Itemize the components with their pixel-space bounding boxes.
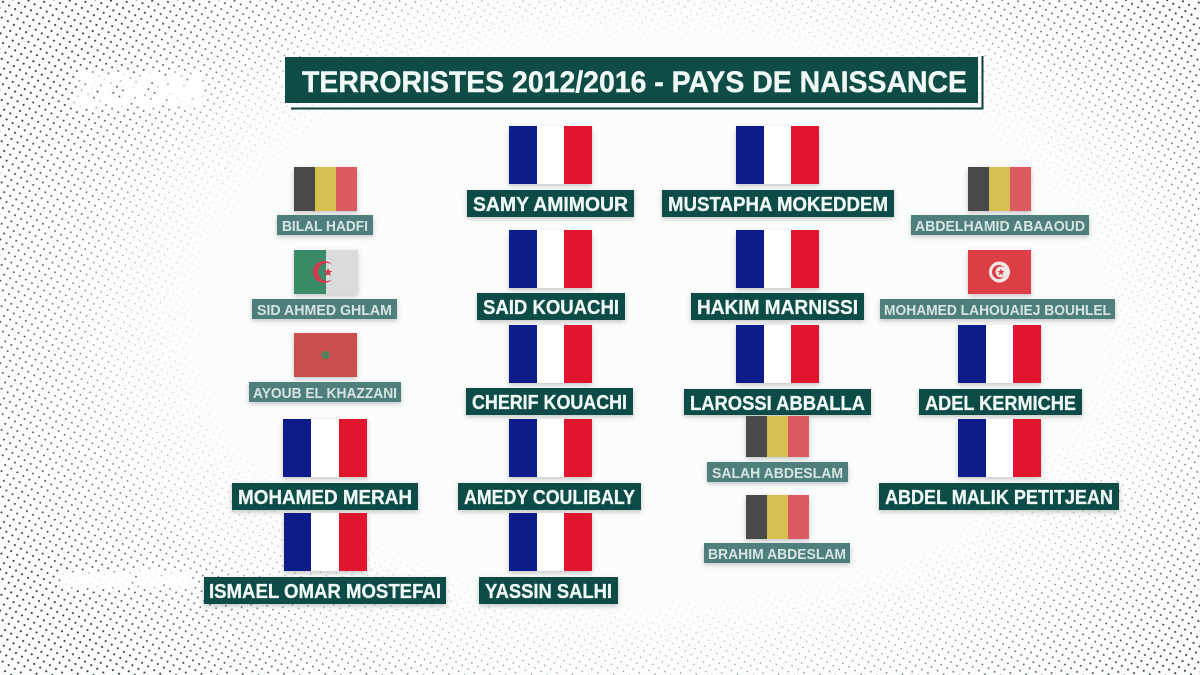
flag: Algeria — [294, 250, 358, 294]
person: Sid Ahmed Ghlam — [252, 250, 397, 319]
flag: Belgium — [746, 495, 809, 539]
name: Ayoub El Khazzani: AYOUB EL KHAZZANI — [253, 385, 397, 402]
flag: France — [509, 230, 592, 288]
name: Mustapha Mokeddem: MUSTAPHA MOKEDDEM — [668, 193, 888, 216]
person: Ayoub El Khazzani — [249, 333, 401, 402]
person: Yassin Salhi — [479, 513, 618, 604]
name: Mohamed Lahouaiej Bouhlel: MOHAMED LAHOUAIEJ BOUHLEL — [884, 302, 1111, 319]
name: Abdelhamid Abaaoud: ABDELHAMID ABAAOUD — [915, 218, 1085, 235]
person: Cherif Kouachi — [466, 325, 633, 415]
person: Samy Amimour — [467, 126, 634, 217]
flag: Belgium — [968, 167, 1031, 211]
person: Larossi Abballa — [684, 325, 871, 415]
title: TERRORISTES 2012/2016 - PAYS DE NAISSANCE — [302, 66, 967, 99]
name: Salah Abdeslam: SALAH ABDESLAM — [712, 465, 843, 482]
name: Abdel Malik Petitjean: ABDEL MALIK PETITJEAN — [885, 486, 1113, 509]
person: Said Kouachi — [477, 230, 625, 320]
flag: France — [284, 513, 367, 571]
name: Hakim Marnissi: HAKIM MARNISSI — [697, 296, 858, 319]
person: Brahim Abdeslam — [704, 495, 850, 563]
ghost logo: ZOOM: ZOOM — [74, 64, 204, 116]
name: Said Kouachi: SAID KOUACHI — [483, 296, 619, 319]
flag: France — [958, 325, 1041, 383]
person: Abdel Malik Petitjean — [879, 419, 1119, 510]
name: Adel Kermiche: ADEL KERMICHE — [925, 392, 1076, 415]
name: Samy Amimour: SAMY AMIMOUR — [473, 193, 628, 216]
name: Amedy Coulibaly: AMEDY COULIBALY — [464, 486, 635, 509]
flag: Tunisia — [968, 250, 1031, 294]
person: Mohamed Lahouaiej Bouhlel — [880, 250, 1115, 319]
person: Abdelhamid Abaaoud — [911, 167, 1089, 235]
name: Mohamed Merah: MOHAMED MERAH — [238, 486, 412, 509]
flag: France — [736, 325, 819, 383]
name: Sid Ahmed Ghlam: SID AHMED GHLAM — [257, 302, 392, 319]
flag: Belgium — [746, 416, 809, 457]
flag: Belgium — [294, 167, 357, 211]
flag: Morocco — [294, 333, 357, 377]
person: Adel Kermiche — [919, 325, 1082, 415]
person: Bilal Hadfi — [277, 167, 373, 235]
title — [285, 56, 982, 108]
flag: France — [736, 230, 819, 288]
flag: France — [283, 419, 367, 477]
name: Bilal Hadfi: BILAL HADFI — [282, 218, 368, 235]
name: Yassin Salhi: YASSIN SALHI — [485, 580, 612, 603]
person: Ismael Omar Mostefai — [204, 513, 446, 604]
flag: France — [958, 419, 1041, 477]
name: Cherif Kouachi: CHERIF KOUACHI — [472, 391, 627, 414]
name: Ismael Omar Mostefai: ISMAEL OMAR MOSTEFAI — [209, 580, 441, 603]
person: Mohamed Merah — [232, 419, 418, 510]
person: Mustapha Mokeddem — [662, 126, 894, 217]
flag: France — [509, 325, 592, 383]
flag: France — [509, 419, 592, 477]
person: Amedy Coulibaly — [458, 419, 641, 510]
flag: France — [509, 126, 592, 184]
flag: France — [736, 126, 819, 184]
person: Hakim Marnissi — [691, 230, 864, 320]
ghost caption bottom left — [60, 569, 191, 588]
flag: France — [509, 513, 592, 571]
name: Brahim Abdeslam: BRAHIM ABDESLAM — [708, 546, 846, 563]
person: Salah Abdeslam — [707, 416, 848, 482]
name: Larossi Abballa: LAROSSI ABBALLA — [690, 392, 865, 415]
